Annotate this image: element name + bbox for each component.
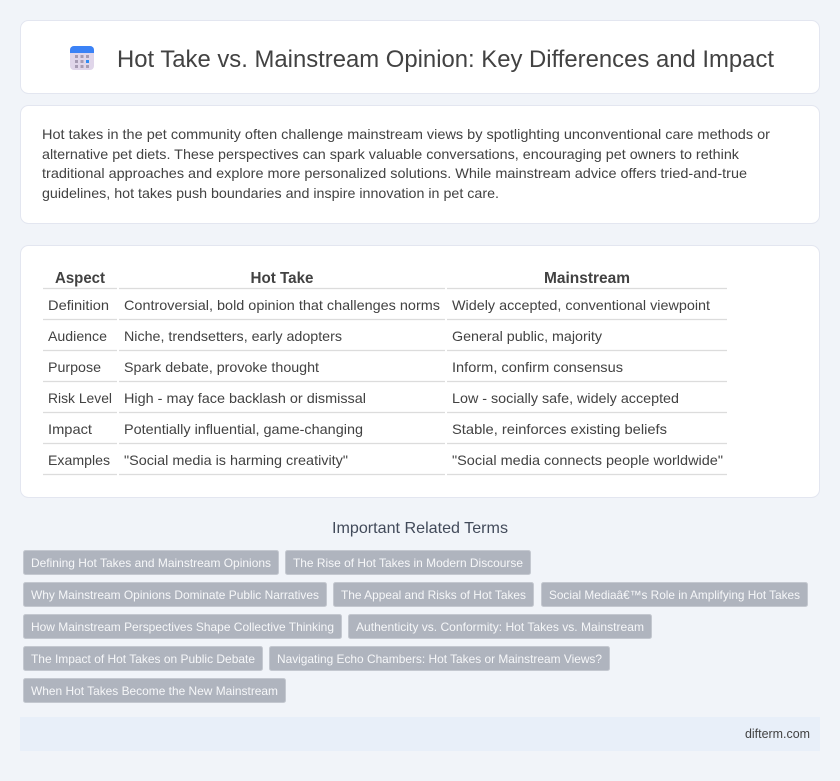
icon: calendar xyxy=(70,46,94,70)
tag xyxy=(24,550,278,574)
row: definition: Definition xyxy=(48,297,109,313)
row: definition xyxy=(48,297,710,313)
tag: Defining Hot Takes and Mainstream Opinions xyxy=(31,556,271,570)
row: purpose: Inform, confirm consensus xyxy=(452,359,623,375)
row: risk level: High - may face backlash or dismissal xyxy=(124,390,366,406)
row: impact: Stable, reinforces existing beliefs xyxy=(452,421,667,437)
footer xyxy=(20,717,820,751)
row: definition: Controversial, bold opinion that challenges norms xyxy=(124,297,440,313)
row: audience: Audience xyxy=(48,328,107,344)
row: audience: Niche, trendsetters, early adopters xyxy=(124,328,342,344)
row: examples: Examples xyxy=(48,452,110,468)
row: impact: Potentially influential, game-changing xyxy=(124,421,363,437)
tag xyxy=(24,646,262,670)
panel: introduction xyxy=(20,106,820,224)
row: purpose: Spark debate, provoke thought xyxy=(124,359,319,375)
tag xyxy=(24,678,286,702)
row: examples: "Social media is harming creativity" xyxy=(124,452,348,468)
table header xyxy=(55,270,630,287)
row: impact xyxy=(48,421,667,437)
tag: Social Mediaâ€™s Role in Amplifying Hot Takes xyxy=(549,588,800,602)
tag xyxy=(24,582,326,606)
tag xyxy=(286,550,530,574)
row: risk level: Low - socially safe, widely accepted xyxy=(452,390,679,406)
heading: related terms: Important Related Terms xyxy=(332,520,508,537)
table header: Hot Take xyxy=(250,270,314,287)
row: purpose xyxy=(48,359,623,375)
related term tags xyxy=(24,550,808,702)
tag: The Appeal and Risks of Hot Takes xyxy=(341,588,526,602)
tag xyxy=(542,582,808,606)
panel: comparison table xyxy=(20,246,820,498)
row: examples: "Social media connects people worldwide" xyxy=(452,452,723,468)
tag: Authenticity vs. Conformity: Hot Takes vs. Mainstream xyxy=(356,620,644,634)
row: definition: Widely accepted, conventional viewpoint xyxy=(452,297,710,313)
tag: The Impact of Hot Takes on Public Debate xyxy=(31,652,255,666)
text block: introduction: alternative pet diets. These perspectives can spark valuable conversations, encouraging pet owners to rethink xyxy=(42,146,740,162)
tag: The Rise of Hot Takes in Modern Discourse xyxy=(293,556,523,570)
text block: introduction xyxy=(42,126,770,201)
tag xyxy=(270,646,610,670)
text block: introduction: Hot takes in the pet community often challenge mainstream views by spotlighting unconventional care methods or xyxy=(42,126,770,142)
text block: introduction: traditional approaches and explore more personalized solutions. While mainstream advice offers tried-and-true xyxy=(42,165,747,181)
tag xyxy=(24,614,342,638)
tag: When Hot Takes Become the New Mainstream xyxy=(31,684,278,698)
row: examples xyxy=(48,452,723,468)
table grid lines xyxy=(43,288,727,474)
row: impact: Impact xyxy=(48,421,92,437)
tag: Navigating Echo Chambers: Hot Takes or Mainstream Views? xyxy=(277,652,602,666)
tag: How Mainstream Perspectives Shape Collective Thinking xyxy=(31,620,334,634)
table header: Aspect xyxy=(55,270,105,287)
row: purpose: Purpose xyxy=(48,359,101,375)
tag xyxy=(348,614,652,638)
row: risk level xyxy=(48,390,679,406)
tag: Why Mainstream Opinions Dominate Public Narratives xyxy=(31,588,319,602)
row: audience: General public, majority xyxy=(452,328,602,344)
title: Hot Take vs. Mainstream Opinion: Key Differences and Impact xyxy=(117,46,774,73)
text block: introduction: guidelines, hot takes push boundaries and inspire innovation in pet care. xyxy=(42,185,499,201)
footer source: difterm.com xyxy=(745,727,810,741)
row: audience xyxy=(48,328,602,344)
table header: Mainstream xyxy=(544,270,630,287)
panel: header xyxy=(20,20,820,94)
tag xyxy=(334,582,534,606)
row: risk level: Risk Level xyxy=(48,390,112,406)
